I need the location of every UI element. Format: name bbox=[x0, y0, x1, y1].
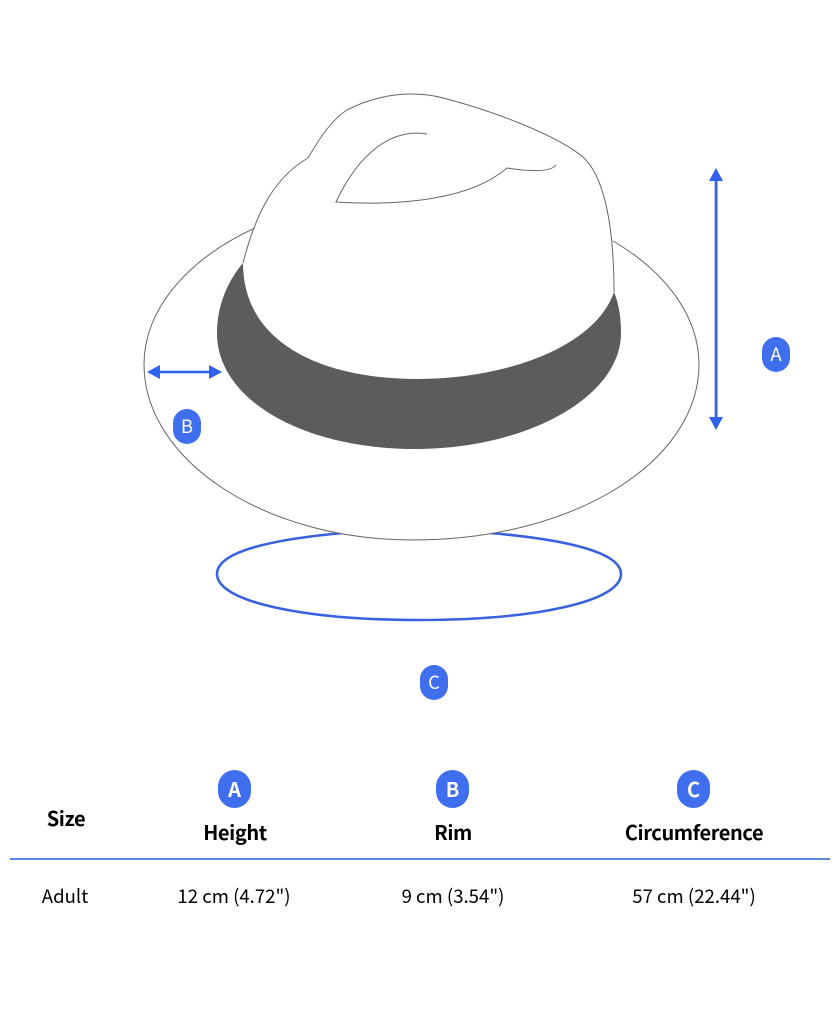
arrow: height A bbox=[709, 168, 723, 430]
row label: adult: Adult bbox=[42, 882, 88, 909]
value: height: 12 cm (4.72") bbox=[177, 882, 291, 909]
circumference ellipse bbox=[217, 533, 621, 620]
column badge B bbox=[436, 770, 469, 808]
value: circumference: 57 cm (22.44") bbox=[632, 882, 756, 909]
hat band bbox=[217, 263, 621, 449]
table divider bbox=[10, 858, 830, 860]
badge B bbox=[173, 409, 201, 444]
arrow: rim B bbox=[147, 365, 222, 379]
badge C bbox=[420, 665, 448, 700]
crown crease bbox=[336, 133, 556, 203]
column badge C bbox=[677, 770, 710, 808]
column badge B: B bbox=[446, 774, 459, 803]
hat diagram bbox=[144, 94, 723, 622]
column heading: rim: Rim bbox=[434, 817, 472, 846]
value: rim: 9 cm (3.54") bbox=[402, 882, 504, 909]
column badge C: C bbox=[687, 774, 700, 803]
badge A bbox=[762, 337, 790, 372]
badge A: A bbox=[770, 341, 782, 367]
hat crown bbox=[243, 94, 614, 379]
hat brim bbox=[144, 228, 699, 540]
column heading: circumference: Circumference bbox=[625, 817, 763, 846]
table header: size: Size bbox=[47, 803, 85, 832]
column badge A bbox=[218, 770, 251, 808]
badge C: C bbox=[428, 669, 440, 695]
badge B: B bbox=[181, 413, 193, 439]
column heading: height: Height bbox=[203, 817, 267, 846]
column badge A: A bbox=[228, 774, 241, 803]
